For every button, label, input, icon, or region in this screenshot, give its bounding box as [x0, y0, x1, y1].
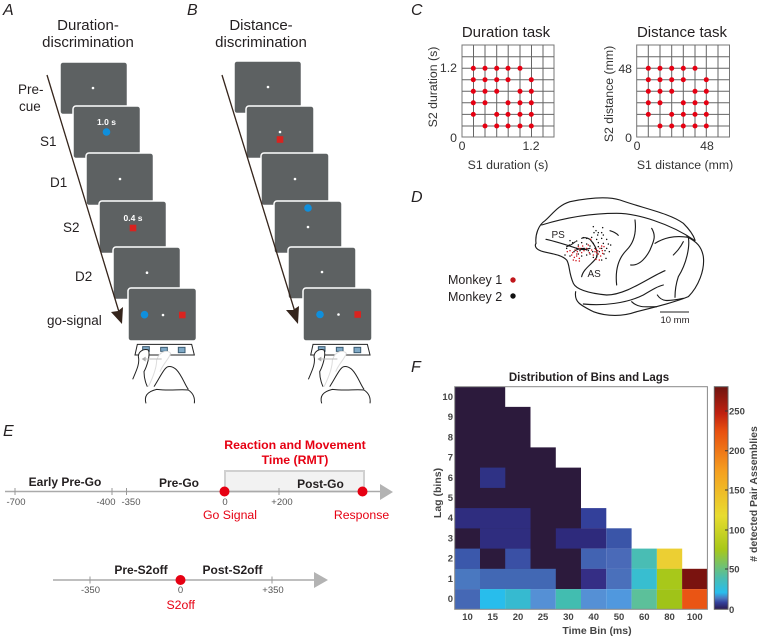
screen: B pre-cue [234, 61, 302, 114]
icon: monkey at response buttons A [133, 344, 194, 403]
panel: D recording sites [411, 189, 704, 326]
legend: monkeys: Monkey 2 [448, 290, 502, 304]
S2off marker: S2off [166, 598, 196, 612]
chart: duration task grid [462, 45, 554, 137]
screen: go-signal [128, 288, 196, 341]
y axis label: Lag (bins) [432, 468, 444, 518]
x axis ticks: time bin: 60 [639, 612, 650, 623]
screen: D1 [86, 153, 154, 206]
y axis ticks: lag: 6 [448, 473, 453, 484]
go timeline period labels [29, 475, 344, 491]
axis labels: duration task: 1.2 [522, 139, 540, 153]
axis labels: distance task: 48 [618, 62, 632, 76]
screen: pre-cue [60, 62, 128, 114]
stage labels A: go-signal [47, 313, 102, 328]
heatmap title: Distribution of Bins and Lags [509, 372, 669, 384]
go timeline period labels: Early Pre-Go [29, 475, 101, 489]
axis labels: distance task [602, 46, 733, 172]
x axis ticks: time bin: 80 [664, 612, 675, 623]
heading: duration task: Duration task [462, 24, 551, 41]
y axis ticks: lag: 3 [448, 534, 453, 544]
axis labels: duration task: S2 duration (s) [426, 47, 440, 127]
panel: E timelines [3, 423, 393, 612]
panel letter A: A [2, 2, 14, 19]
screen: B go-signal [303, 288, 372, 341]
axis labels: distance task: 0 [625, 131, 632, 145]
x axis ticks: time bin: 50 [614, 612, 624, 623]
stage labels A: D2 [75, 269, 92, 284]
S2off timeline axis [53, 572, 328, 588]
screen: D2 [113, 247, 180, 300]
S2off timeline period labels [114, 563, 264, 577]
panel letter D: D [411, 189, 423, 206]
axis labels: duration task: 0 [459, 139, 466, 153]
scatter: monkey 1 sites [567, 239, 604, 261]
legend: monkeys [448, 273, 516, 304]
y axis ticks: lag: 9 [448, 412, 453, 423]
RMT heading: Time (RMT) [262, 453, 328, 467]
screen: S2 0.4 s red square [99, 201, 166, 254]
axis labels: duration task [426, 47, 548, 172]
S2off timeline period labels: Pre-S2off [114, 563, 169, 577]
colour bar: 250 [729, 406, 745, 418]
scatter: monkey 2 sites [565, 227, 611, 260]
heading: duration discrimination: Duration- [57, 17, 119, 34]
stage labels A: S1 [40, 134, 57, 149]
heading: duration discrimination: discrimination [42, 34, 134, 51]
y axis ticks: lag: 8 [448, 432, 453, 444]
go timeline tick labels: +200 [271, 497, 293, 508]
x axis ticks: time bin: 15 [487, 612, 499, 623]
x axis ticks: time bin: 30 [563, 612, 574, 623]
go timeline period labels: Post-Go [297, 477, 344, 491]
x axis ticks: time bin: 100 [687, 612, 703, 623]
screen: B D1 [261, 153, 329, 206]
S2off timeline tick labels [81, 585, 284, 596]
go timeline tick labels: -700 [6, 497, 26, 508]
response marker: Response [334, 508, 389, 522]
stage labels A: cue [19, 99, 41, 114]
heading: distance task: Distance task [637, 24, 728, 41]
axis labels: duration task: 1.2 [440, 61, 457, 75]
y axis ticks: lag: 1 [448, 574, 454, 585]
S2off timeline period labels: Post-S2off [202, 563, 264, 577]
y axis ticks: lag: 4 [448, 513, 454, 524]
y axis ticks: lag: 2 [448, 554, 453, 564]
scale bar: 10 mm [660, 315, 690, 326]
panel letter F: F [411, 359, 422, 376]
y axis ticks: lag: 10 [442, 392, 453, 403]
y axis ticks: lag: 7 [448, 452, 453, 464]
colour bar: 100 [729, 526, 745, 536]
S2off timeline tick labels: 0 [178, 585, 183, 596]
screen: B S2 [274, 201, 342, 254]
panel letter E: E [3, 423, 14, 440]
heatmap cells [455, 387, 707, 609]
panel letter B: B [187, 2, 198, 19]
go timeline axis [5, 484, 393, 500]
sulcus label AS: AS [588, 269, 601, 280]
heading: distance discrimination: discrimination [215, 34, 307, 51]
screen: S1 1.0 s blue circle [73, 106, 140, 158]
icon: brain outline [535, 198, 704, 315]
panel: B distance discrimination [187, 2, 372, 403]
go signal marker [203, 486, 257, 522]
axis labels: duration task: S1 duration (s) [468, 158, 548, 172]
legend: monkeys: Monkey 1 [448, 273, 502, 287]
time arrow A [47, 75, 123, 324]
axis labels: distance task: S1 distance (mm) [637, 158, 733, 172]
go timeline period labels: Pre-Go [159, 476, 199, 490]
go timeline tick labels [6, 497, 293, 508]
stage labels A: Pre- [18, 82, 44, 97]
colour bar [714, 387, 745, 616]
x axis ticks: time bin: 20 [513, 612, 523, 623]
y axis ticks: lag: 5 [448, 493, 454, 504]
icon: monkey at response buttons B [308, 344, 370, 403]
x axis ticks: time bin: 40 [588, 612, 599, 623]
go timeline tick labels: -400 [96, 497, 116, 508]
S2off marker [166, 575, 196, 612]
chart: distance task grid [637, 45, 730, 137]
go timeline tick labels: 0 [222, 497, 228, 508]
S2off timeline tick labels: -350 [81, 585, 100, 596]
RMT heading: Reaction and Movement [224, 438, 366, 452]
colour bar: 0 [729, 605, 734, 616]
x axis label: Time Bin (ms) [562, 625, 632, 637]
panel letter C: C [411, 2, 423, 19]
x axis ticks: time bin [462, 612, 703, 623]
x axis ticks: time bin: 10 [462, 612, 473, 623]
S2off timeline tick labels: +350 [262, 585, 284, 596]
panel: C stimulus grids [411, 2, 733, 172]
heading: distance discrimination: Distance- [229, 17, 293, 34]
axis labels: distance task: 48 [700, 139, 714, 153]
response marker [334, 486, 389, 522]
go signal marker: Go Signal [203, 508, 257, 522]
panel: F heatmap [411, 359, 760, 637]
time arrow B [222, 75, 299, 324]
x axis ticks: time bin: 25 [538, 612, 549, 623]
screen: B D2 [288, 247, 356, 299]
panel: A duration discrimination [2, 2, 196, 403]
axis labels: duration task: 0 [450, 131, 457, 145]
y axis ticks: lag: 0 [448, 594, 453, 605]
y axis ticks: lag [442, 392, 454, 605]
stage labels A: S2 [63, 220, 80, 235]
go timeline tick labels: -350 [121, 497, 141, 508]
colour bar: 150 [729, 486, 745, 496]
colour bar label: # detected Pair Assemblies [748, 426, 760, 562]
axis labels: distance task: 0 [634, 139, 641, 153]
RMT window box [225, 471, 364, 492]
colour bar: 200 [729, 446, 745, 457]
screen: B S1 [246, 106, 314, 158]
screen: S2 0.4 s red square: 0.4 s [124, 213, 143, 223]
screen: S1 1.0 s blue circle: 1.0 s [97, 117, 116, 127]
axis labels: distance task: S2 distance (mm) [602, 46, 616, 142]
colour bar: 50 [729, 564, 740, 576]
stage labels A: D1 [50, 175, 67, 190]
sulcus label PS: PS [552, 230, 565, 241]
